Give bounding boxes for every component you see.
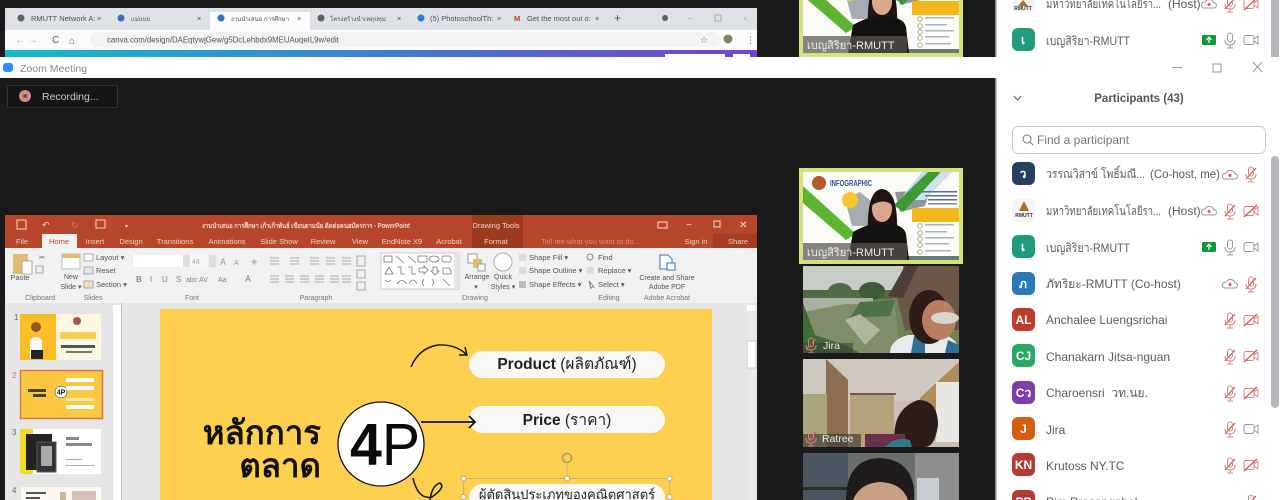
canva toolbar strip	[5, 50, 757, 57]
slide title: หลักการ	[203, 414, 321, 451]
search field: Find a participant	[1037, 133, 1130, 147]
ribbon tabs: Insert	[86, 237, 105, 246]
home tab	[42, 234, 77, 248]
row: Krutoss	[1012, 453, 1258, 476]
thumbnail 4	[21, 487, 101, 500]
window controls	[658, 220, 747, 231]
video tile: Ratree: Ratree	[822, 433, 854, 445]
row: speaker	[1012, 235, 1258, 258]
zoom title bar: Zoom Meeting	[20, 63, 87, 75]
ribbon tabs: File	[16, 237, 28, 246]
font group	[133, 255, 258, 302]
browser tab labels: แม่แบบ	[131, 16, 150, 23]
row: Charoensri	[1012, 381, 1258, 404]
ribbon	[5, 248, 757, 303]
video tile: speaker: INFOGRAPHIC	[830, 179, 872, 188]
browser tab labels: ×	[397, 14, 401, 23]
cropped host row: RMUTT	[1014, 6, 1032, 12]
quick access icons: ↻	[71, 220, 79, 230]
row: Anchalee: Anchalee Luengsrichai	[1046, 313, 1167, 327]
font group: S	[176, 275, 181, 284]
font group: abc	[186, 277, 198, 284]
font group: U	[162, 275, 168, 284]
video tile: speaker	[799, 168, 963, 264]
browser address bar: ☆	[700, 35, 708, 45]
participants panel	[995, 0, 1280, 500]
browser address bar: C	[52, 35, 59, 46]
browser tab labels: Get the most out o:	[527, 14, 591, 23]
cropped speaker row: เบญสิริยา-RMUTT	[1046, 34, 1131, 48]
document title: งานนำเสนอ การศึกษา เก้าเก้าพันธ์ เขียนตามนัย ติดต่อคนสมัครการ - PowerPoint	[202, 221, 411, 230]
browser tab labels: RMUTT Network A:	[31, 14, 95, 23]
participants heading: Participants (43)	[1094, 93, 1184, 105]
browser address bar: ⌂	[69, 36, 75, 47]
cropped speaker row	[1012, 28, 1258, 51]
search field	[1012, 126, 1266, 154]
browser tab labels: +	[614, 11, 621, 25]
row: Anchalee	[1012, 308, 1258, 331]
browser address bar: ← →	[15, 35, 38, 46]
product pill	[469, 351, 665, 378]
slides group: Section ▾	[96, 280, 127, 289]
video tile: participant face	[803, 453, 959, 500]
browser address bar: canva.com/design/DAEqtywjGew/g5DcLehbdx9MEUAuqeIL9w/edit	[107, 36, 340, 44]
quick access icons: ▾	[125, 224, 128, 230]
browser tab labels: งานนำเสนอ การศึกษา	[231, 16, 289, 23]
clipboard group: Paste	[10, 273, 30, 282]
row: co-host me: วรรณวิสาข์ โพธิ์มณี...	[1046, 165, 1145, 181]
row: co-host me: (Co-host, me)	[1150, 167, 1220, 181]
ribbon tabs: EndNote X9	[382, 237, 422, 246]
slides group: Slide ▾	[60, 284, 82, 291]
quick access icons	[17, 220, 128, 230]
slides group: New	[64, 274, 79, 281]
ribbon tabs: Animations	[208, 237, 246, 246]
cropped speaker row: เ	[1021, 33, 1025, 47]
editing group	[587, 253, 632, 302]
slides group: Slides	[83, 295, 103, 302]
slide title	[204, 417, 321, 478]
video tile: speaker: เบญสิริยา-RMUTT	[807, 247, 895, 259]
powerpoint window: Drawing Tools	[473, 221, 520, 230]
font group: Aa	[218, 277, 227, 284]
ribbon tabs: Review	[311, 237, 336, 246]
arrange and quick styles: Shape Fill ▾	[529, 253, 568, 262]
row: Krutoss: KN	[1015, 458, 1032, 472]
arrange and quick styles: Shape Outline ▾	[529, 266, 583, 275]
font group: ◈	[251, 257, 258, 266]
browser tab labels: ×	[197, 14, 201, 23]
main slide: 4P marketing	[160, 309, 712, 500]
product pill: Product (ผลิตภัณฑ์)	[497, 355, 637, 373]
panel window controls	[996, 57, 1280, 78]
row: co-host me	[1012, 162, 1256, 185]
arrow to price	[421, 416, 475, 428]
participants heading	[1014, 93, 1184, 105]
clipboard group: ✂	[39, 253, 45, 262]
row: Chanakarn	[1012, 344, 1258, 367]
thumbnail panel: 3	[12, 428, 17, 437]
panel scrollbar top	[1271, 0, 1279, 57]
panel scrollbar	[1271, 156, 1279, 408]
cropped host row	[1012, 0, 1258, 12]
price pill: Price (ราคา)	[523, 412, 611, 429]
4P circle: 4P	[350, 412, 420, 478]
ribbon tabs: Share	[728, 237, 748, 246]
row: Jira: Jira	[1046, 423, 1066, 437]
browser tab labels: ×	[497, 14, 501, 23]
thumbnail 3	[20, 429, 101, 474]
looping arrow	[413, 478, 442, 500]
ribbon tabs: Slide Show	[260, 237, 298, 246]
thumbnail panel: 4	[12, 486, 17, 495]
font group: Font	[185, 295, 199, 302]
row: speaker: เ	[1021, 240, 1025, 254]
arrange and quick styles: Shape Effects ▾	[529, 280, 582, 289]
selected pill	[461, 454, 672, 500]
title bar	[5, 215, 757, 248]
row: Jira	[1012, 417, 1258, 440]
ribbon tabs: Transitions	[157, 237, 193, 246]
adobe acrobat group: Adobe PDF	[649, 284, 685, 291]
rotation handle	[562, 454, 572, 462]
paragraph group	[270, 256, 365, 302]
thumbnail 2 selected: 4P	[57, 390, 66, 396]
paragraph group: Paragraph	[300, 295, 332, 302]
row: host	[1012, 199, 1258, 222]
clipboard group: Clipboard	[25, 295, 55, 302]
thumbnail panel: 1	[14, 313, 19, 322]
browser tab labels: โครงสร้างนำเหตุปทุม:	[330, 15, 388, 23]
ribbon tabs: Home	[49, 237, 69, 246]
arrange and quick styles: Styles ▾	[491, 284, 516, 291]
font group: I	[150, 275, 152, 284]
4P circle	[338, 402, 424, 486]
video tile top (speaker, cropped): เบญสิริยา-RMUTT	[807, 40, 895, 52]
browser tab labels: (5) PhotoschoolTh:	[430, 14, 493, 23]
ribbon tabs: Acrobat	[436, 237, 463, 246]
row: Charoensri: Cว	[1016, 386, 1031, 400]
row: co-host: ภ	[1019, 277, 1027, 291]
drawing tools tab	[472, 215, 523, 248]
row: speaker: เบญสิริยา-RMUTT	[1046, 241, 1131, 255]
video tile: Jira	[803, 266, 959, 353]
adobe acrobat group: Adobe Acrobat	[644, 295, 690, 302]
row: Jira: J	[1020, 422, 1027, 436]
window controls: ✕	[739, 220, 747, 231]
price pill	[469, 406, 665, 433]
browser tab labels: ×	[595, 14, 599, 23]
row: partially visible	[1012, 490, 1256, 500]
arrange and quick styles: Arrange	[465, 274, 490, 281]
thumbnail panel	[5, 303, 122, 500]
font group: A	[220, 257, 226, 267]
browser address bar: ⋮	[746, 35, 755, 45]
quick access icons: ↶	[42, 220, 50, 230]
browser tab labels	[18, 11, 747, 25]
font group: AV	[199, 277, 208, 284]
video tile: Jira: Jira	[823, 340, 840, 352]
editing group: Replace ▾	[598, 266, 632, 275]
arrange and quick styles: ▾	[474, 284, 478, 291]
arrange and quick styles: Quick	[494, 274, 512, 281]
clipboard group	[10, 253, 55, 302]
thumbnail 1	[20, 314, 101, 360]
slide scrollbar	[747, 305, 757, 500]
browser tab labels: −	[688, 14, 693, 23]
ribbon tabs: Tell me what you want to do...	[541, 237, 640, 246]
ribbon tabs: Sign in	[685, 237, 707, 246]
row: host: RMUTT	[1015, 213, 1033, 219]
row: Krutoss: Krutoss NY.TC	[1046, 459, 1125, 473]
adobe acrobat group	[639, 255, 695, 302]
thumbnail 2 selected	[20, 370, 102, 418]
row: co-host me: ว	[1020, 167, 1027, 181]
arrange and quick styles	[462, 253, 583, 302]
browser window	[5, 8, 757, 57]
ribbon tabs: Design	[119, 237, 143, 246]
recording button: Recording...	[42, 91, 99, 103]
editing group: Find	[598, 253, 613, 262]
row: Anchalee: AL	[1016, 313, 1032, 327]
editing group: Select ▾	[598, 280, 625, 289]
shapes gallery	[381, 253, 459, 289]
adobe acrobat group: Create and Share	[639, 275, 695, 282]
video tile top (speaker, cropped)	[799, 0, 963, 57]
thumbnail panel: 2	[12, 371, 17, 380]
ribbon tabs	[16, 234, 757, 248]
slides group: Layout ▾	[96, 253, 125, 262]
browser address bar	[15, 32, 755, 47]
video tile: Ratree	[803, 359, 959, 447]
browser tab labels: ×	[297, 14, 301, 23]
row: Chanakarn: Chanakarn Jitsa-nguan	[1046, 350, 1170, 364]
font group: B	[136, 275, 142, 284]
ribbon tabs: View	[352, 237, 369, 246]
zoom title bar	[0, 57, 996, 78]
row: co-host: ภัทริยะ-RMUTT (Co-host)	[1046, 277, 1181, 291]
editing group: Editing	[598, 295, 620, 302]
slide title: ตลาด	[239, 447, 321, 484]
active browser tab	[210, 12, 310, 30]
font group: A	[245, 274, 251, 284]
slides group: Reset	[96, 266, 117, 275]
font group: A	[234, 260, 239, 267]
browser tab labels: ×	[97, 14, 101, 23]
row: Chanakarn: CJ	[1016, 349, 1031, 363]
slides group	[60, 253, 127, 302]
recording button	[8, 86, 118, 108]
window controls: −	[686, 220, 692, 231]
powerpoint window	[5, 215, 757, 500]
row: host: (Host)	[1168, 204, 1201, 218]
ribbon tabs: Format	[484, 237, 509, 246]
row: host: มหาวิทยาลัยเทคโนโลยีรา...	[1046, 204, 1161, 218]
row: co-host	[1012, 272, 1256, 295]
font group: 48	[192, 259, 200, 266]
arrange and quick styles: Drawing	[462, 295, 488, 302]
row: Charoensri: Charoensri วท.นย.	[1046, 386, 1148, 400]
browser tab labels: M	[514, 14, 520, 23]
arrow to product	[411, 345, 467, 367]
browser tab labels: ×	[743, 14, 747, 23]
